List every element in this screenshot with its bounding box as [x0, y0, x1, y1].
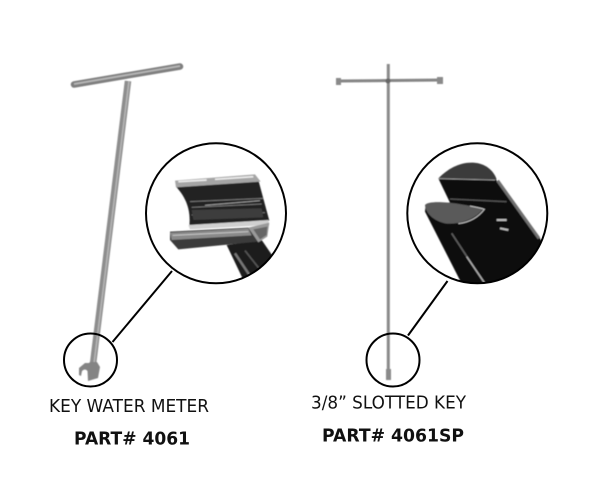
label: part number 4061SP: PART# 4061SP — [322, 426, 464, 446]
callout: magnified slotted key head — [406, 142, 548, 284]
illustration: slotted key tool — [336, 64, 443, 380]
label: part number 4061: PART# 4061 — [74, 430, 190, 450]
leader line: water meter key — [112, 271, 172, 342]
label: 3/8 inch slotted key: 3/8” SLOTTED KEY — [311, 392, 467, 414]
callout: small circle on water meter key tip — [64, 334, 117, 386]
label: key water meter: KEY WATER METER — [49, 396, 209, 417]
leader line: slotted key — [408, 281, 448, 336]
callout: magnified water meter key head — [146, 143, 286, 283]
illustration: water meter key tool — [74, 66, 180, 381]
callout: small circle on slotted key tip — [366, 334, 420, 386]
infographic canvas — [50, 62, 548, 445]
